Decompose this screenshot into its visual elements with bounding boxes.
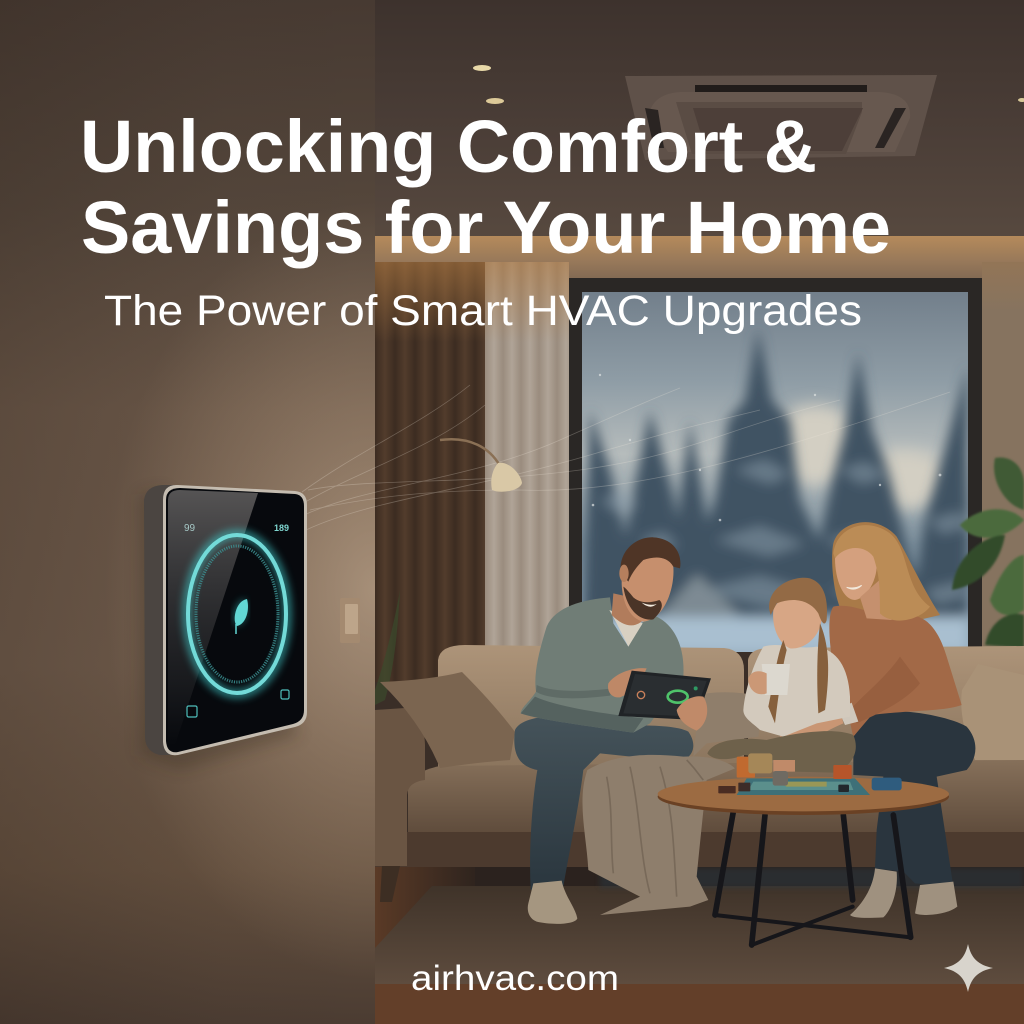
man jeans bbox=[514, 717, 693, 890]
ceiling cassette air conditioner bbox=[625, 75, 937, 160]
man shoe bbox=[528, 881, 577, 924]
girl bbox=[707, 578, 856, 773]
ring gauge bbox=[187, 534, 287, 694]
man sweater bbox=[521, 597, 684, 733]
woman hair back bbox=[832, 522, 940, 627]
woman hand bbox=[780, 709, 843, 754]
man hands bbox=[608, 668, 647, 697]
throw pillows bbox=[380, 664, 1024, 768]
table top bbox=[658, 778, 949, 815]
trees bbox=[582, 328, 968, 653]
board game and pieces bbox=[718, 753, 902, 795]
woman jeans bbox=[853, 711, 975, 887]
small potted plant behind sofa arm bbox=[375, 590, 400, 705]
floor and rug bbox=[375, 860, 1024, 1024]
girl blouse bbox=[743, 645, 850, 737]
cove lighting band bbox=[375, 236, 1024, 286]
left wall bbox=[0, 0, 375, 1024]
girl pants bbox=[707, 731, 856, 773]
woman bbox=[780, 522, 975, 918]
screen icons bbox=[187, 690, 289, 717]
pillow knit bbox=[693, 692, 763, 757]
snowflakes bbox=[592, 374, 941, 521]
room ceiling bbox=[375, 0, 1024, 240]
thermostat shadow bbox=[140, 490, 300, 770]
plant bbox=[952, 457, 1024, 648]
woman socks bbox=[850, 868, 897, 918]
airflow lines and wall lamp bbox=[300, 385, 950, 530]
title: Savings for Your Home bbox=[81, 186, 891, 269]
light switch bbox=[340, 598, 360, 643]
table legs bbox=[715, 812, 911, 945]
people illustrated in zoomed coordinates bbox=[514, 522, 975, 945]
tablet bbox=[618, 671, 711, 731]
man bbox=[514, 537, 693, 924]
sofa bbox=[375, 645, 1024, 902]
screen readouts: 99 bbox=[184, 523, 196, 534]
left and right curtains bbox=[375, 262, 1024, 682]
title: Unlocking Comfort & bbox=[80, 105, 817, 188]
woman sweater bbox=[829, 606, 962, 737]
man undershirt bbox=[609, 610, 643, 647]
bright clouds bbox=[783, 397, 850, 492]
title bbox=[80, 105, 891, 269]
website footer: airhvac.com bbox=[411, 959, 619, 998]
girl hands and mug bbox=[762, 664, 790, 695]
girl foot bbox=[773, 760, 795, 772]
icon: leaf bbox=[235, 599, 248, 634]
icon: ceiling downlights bbox=[473, 65, 1024, 104]
subtitle: The Power of Smart HVAC Upgrades bbox=[104, 287, 862, 335]
smart thermostat: 189 bbox=[274, 523, 289, 533]
woman head bbox=[835, 546, 877, 600]
blanket bbox=[582, 755, 735, 915]
screen reflection bbox=[168, 490, 258, 746]
man neck and head bbox=[612, 593, 643, 625]
thermostat body bbox=[144, 485, 175, 755]
window with snowy forest bbox=[568, 278, 982, 653]
smart thermostat bbox=[140, 485, 307, 770]
girl head and hair bbox=[773, 595, 822, 648]
icon: sparkle bbox=[944, 944, 993, 992]
table bbox=[658, 777, 949, 945]
